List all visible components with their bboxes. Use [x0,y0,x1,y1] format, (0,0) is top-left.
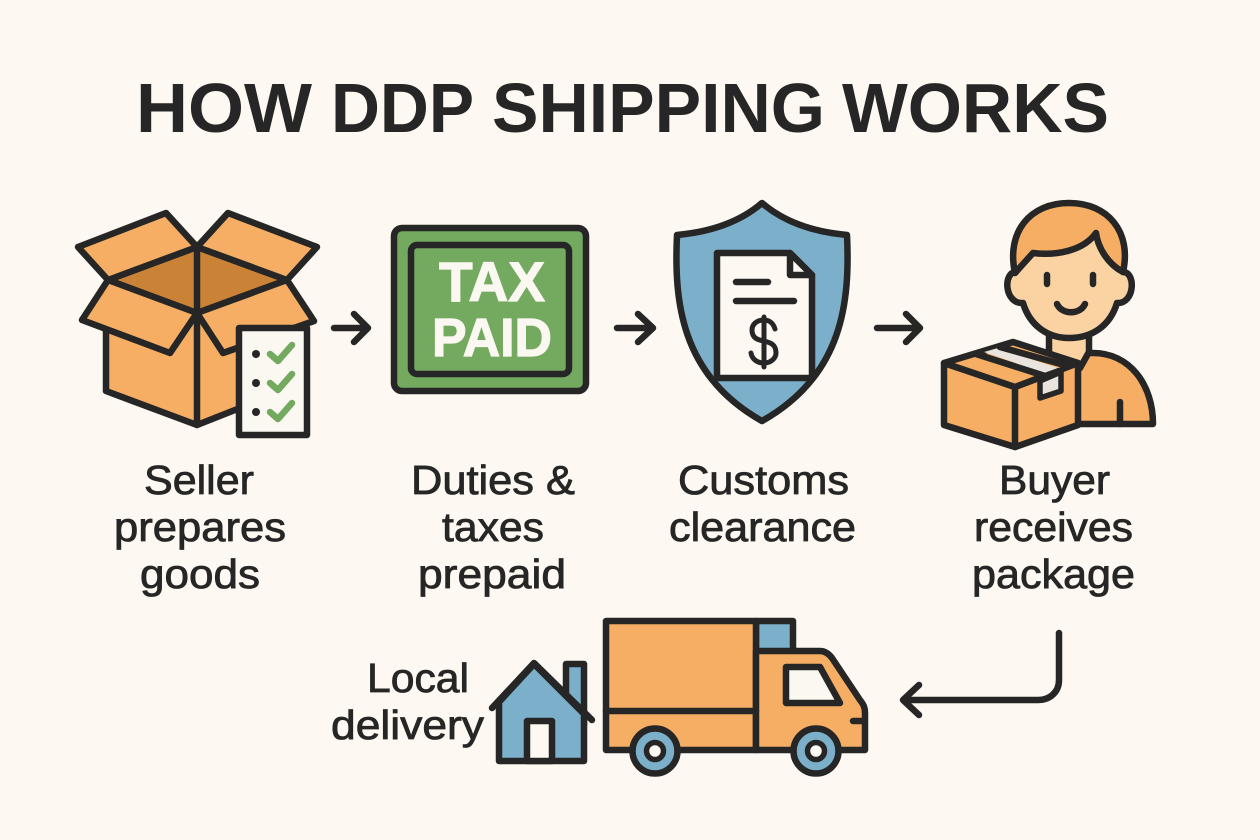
front wheel [794,728,838,774]
title: SHIPPING [492,69,825,147]
icon: tax paid stamp: TAX [439,250,545,313]
title: WORKS [842,69,1109,147]
icon: house [492,663,592,761]
body [1060,353,1153,424]
head and face [1007,225,1132,338]
label: customs clearance: Customs [678,457,849,503]
label: local delivery [331,655,485,748]
hair [1013,203,1125,273]
title: DDP [331,69,474,147]
label: local delivery: Local [367,655,469,701]
label: duties and taxes prepaid: Duties & [411,457,575,503]
label: seller prepares goods: prepares [114,504,286,550]
rear wheel [632,728,678,774]
package [944,342,1078,447]
label: buyer receives package [972,457,1135,597]
eyes and smile [1047,275,1093,284]
title: HOW [136,69,312,147]
icon: open box with checklist [78,213,317,435]
arrow: step 2 to step 3 [617,314,653,342]
label: buyer receives package: package [972,551,1135,597]
title [136,69,1109,147]
label: buyer receives package: Buyer [999,457,1110,503]
label: customs clearance [669,457,856,550]
label: seller prepares goods: goods [140,551,260,597]
icon: shield with customs document [676,203,848,421]
label: local delivery: delivery [331,702,485,748]
label: customs clearance: clearance [669,504,856,550]
icon: buyer holding package [944,203,1153,447]
icon: tax paid stamp: PAID [432,308,552,368]
label: duties and taxes prepaid: prepaid [418,551,566,597]
customs document [717,253,812,378]
arrow: buyer back to local delivery [903,633,1059,715]
label: duties and taxes prepaid: taxes [442,504,544,550]
neck [1049,330,1089,368]
label: seller prepares goods [114,457,286,597]
arrow: step 3 to step 4 [877,314,920,342]
checklist [239,328,307,435]
label: buyer receives package: receives [974,504,1133,550]
icon: delivery truck [606,621,865,774]
icon: tax paid stamp [394,228,586,391]
label: duties and taxes prepaid [411,457,575,597]
arrow: step 1 to step 2 [334,314,368,342]
label: seller prepares goods: Seller [144,457,254,503]
